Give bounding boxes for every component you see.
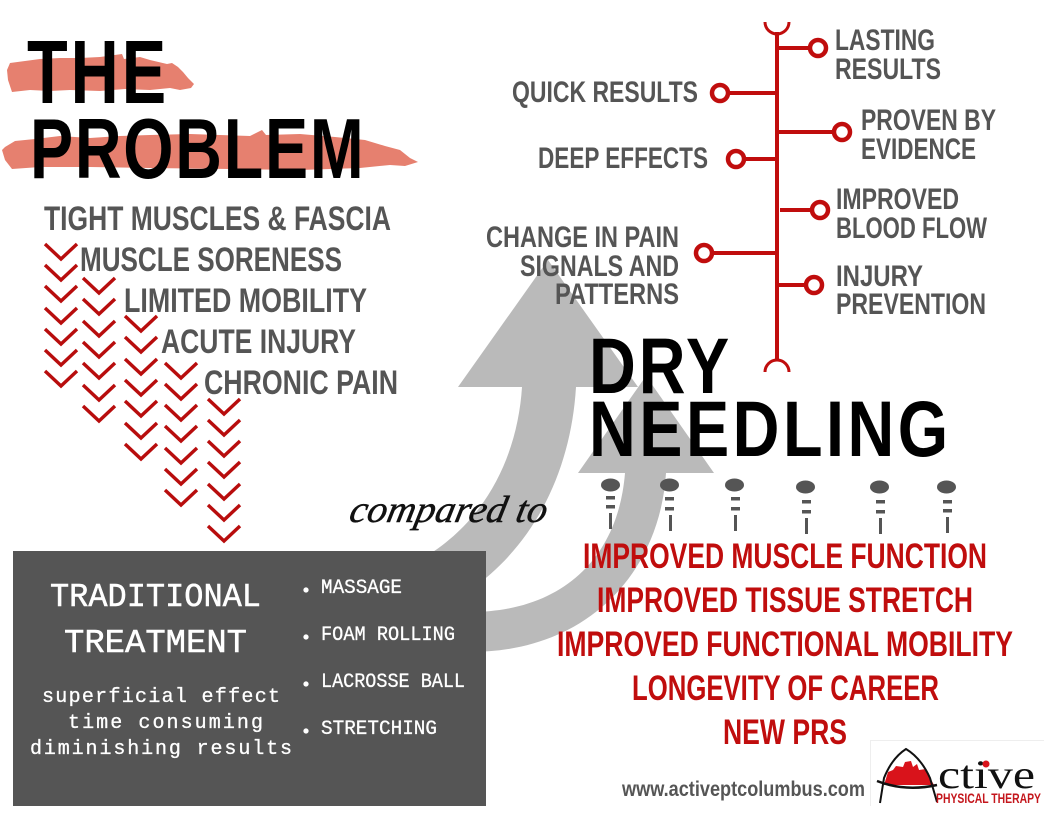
label: change in pain: PATTERNS xyxy=(555,278,679,311)
heading: treatment: TREATMENT xyxy=(64,625,247,662)
label: improved blood flow xyxy=(836,183,987,245)
text block: problem list xyxy=(44,200,398,402)
logo: active physical therapy xyxy=(870,740,1044,806)
needle 1 xyxy=(601,478,620,529)
text: effects: time consuming xyxy=(68,712,263,735)
branch: proven by evidence xyxy=(777,124,850,140)
text: effects xyxy=(30,686,292,761)
needle 3 xyxy=(725,478,744,531)
needle 5 xyxy=(870,480,889,534)
branch: blood flow xyxy=(780,202,828,218)
chevrons column 3 xyxy=(125,316,157,459)
panel background xyxy=(13,551,486,806)
heading: DRY: DRY xyxy=(589,323,729,410)
logo base line xyxy=(877,781,937,788)
icon: needles xyxy=(601,478,956,534)
needle 6 xyxy=(937,480,956,533)
benefit: longevity: LONGEVITY OF CAREER xyxy=(632,669,939,708)
branch: quick results xyxy=(712,85,777,101)
text block: dry needling benefits xyxy=(557,537,1013,752)
label: change in pain xyxy=(486,221,679,311)
logo red skyline xyxy=(884,761,934,785)
label: injury prevention: PREVENTION xyxy=(836,288,986,321)
timeline spine xyxy=(775,32,779,360)
chart: benefits timeline xyxy=(696,22,850,372)
label: quick results: QUICK RESULTS xyxy=(512,76,698,109)
label: lasting results xyxy=(835,24,941,86)
arrow: lower grey curved arrow xyxy=(470,376,714,652)
top cap xyxy=(765,22,789,34)
branch: deep effects xyxy=(728,151,777,167)
text: website: www.activeptcolumbus.com xyxy=(621,778,865,801)
brush stroke behind PROBLEM xyxy=(2,130,418,170)
list: traditional methods: FOAM ROLLING xyxy=(321,624,455,647)
chevrons column 5 xyxy=(208,399,240,541)
chevrons column 2 xyxy=(83,278,115,421)
logo arch xyxy=(880,749,937,803)
needle 4 xyxy=(796,480,815,534)
bottom cap xyxy=(765,360,789,372)
text: effects: superficial effect xyxy=(42,686,280,709)
list: traditional methods xyxy=(304,577,465,741)
label: injury prevention xyxy=(836,260,986,321)
label: deep effects: DEEP EFFECTS xyxy=(538,142,708,175)
icon: chevron columns xyxy=(45,244,240,541)
label: change in pain: CHANGE IN PAIN xyxy=(486,221,679,254)
title: THE: THE xyxy=(27,21,166,122)
label: proven by evidence xyxy=(861,104,996,166)
chevrons column 4 xyxy=(165,363,197,505)
heading: dry needling xyxy=(589,323,948,473)
branch: injury prevention xyxy=(777,277,822,293)
list: traditional methods: LACROSSE BALL xyxy=(321,671,465,694)
list: traditional methods: MASSAGE xyxy=(321,577,402,600)
needle 2 xyxy=(660,478,679,531)
panel: the problem heading xyxy=(2,21,418,196)
label: proven by evidence: EVIDENCE xyxy=(861,133,976,166)
label: improved blood flow: BLOOD FLOW xyxy=(836,212,987,245)
benefit: new prs: NEW PRS xyxy=(723,713,847,752)
label: change in pain: SIGNALS AND xyxy=(520,250,679,283)
label: improved blood flow: IMPROVED xyxy=(836,183,959,216)
text: compared to: compared to xyxy=(346,489,552,531)
logo wordmark: ctive xyxy=(938,752,1035,797)
label: lasting results: LASTING xyxy=(835,24,935,57)
text block: timeline labels xyxy=(486,24,996,321)
heading: NEEDLING: NEEDLING xyxy=(589,386,948,473)
arrow: upper grey curved arrow xyxy=(420,260,638,590)
title: PROBLEM: PROBLEM xyxy=(30,101,364,196)
label: proven by evidence: PROVEN BY xyxy=(861,104,996,137)
logo dot xyxy=(982,760,990,768)
problem: soreness: MUSCLE SORENESS xyxy=(80,241,342,279)
problem: mobility: LIMITED MOBILITY xyxy=(124,282,367,320)
label: injury prevention: INJURY xyxy=(836,260,923,293)
panel: traditional treatment xyxy=(13,551,486,806)
brush stroke behind THE xyxy=(7,54,194,92)
heading: traditional: TRADITIONAL xyxy=(50,579,261,616)
text: effects: diminishing results xyxy=(30,738,292,761)
logo border xyxy=(870,740,1044,806)
problem: tight muscles: TIGHT MUSCLES & FASCIA xyxy=(44,200,391,238)
chevrons column 1 xyxy=(45,244,77,386)
problem: acute injury: ACUTE INJURY xyxy=(161,323,356,361)
list: traditional methods: STRETCHING xyxy=(321,718,437,741)
branch: lasting results xyxy=(777,40,826,56)
branch: pain signals xyxy=(696,245,777,261)
label: lasting results: RESULTS xyxy=(835,53,941,86)
problem: chronic pain: CHRONIC PAIN xyxy=(204,364,398,402)
